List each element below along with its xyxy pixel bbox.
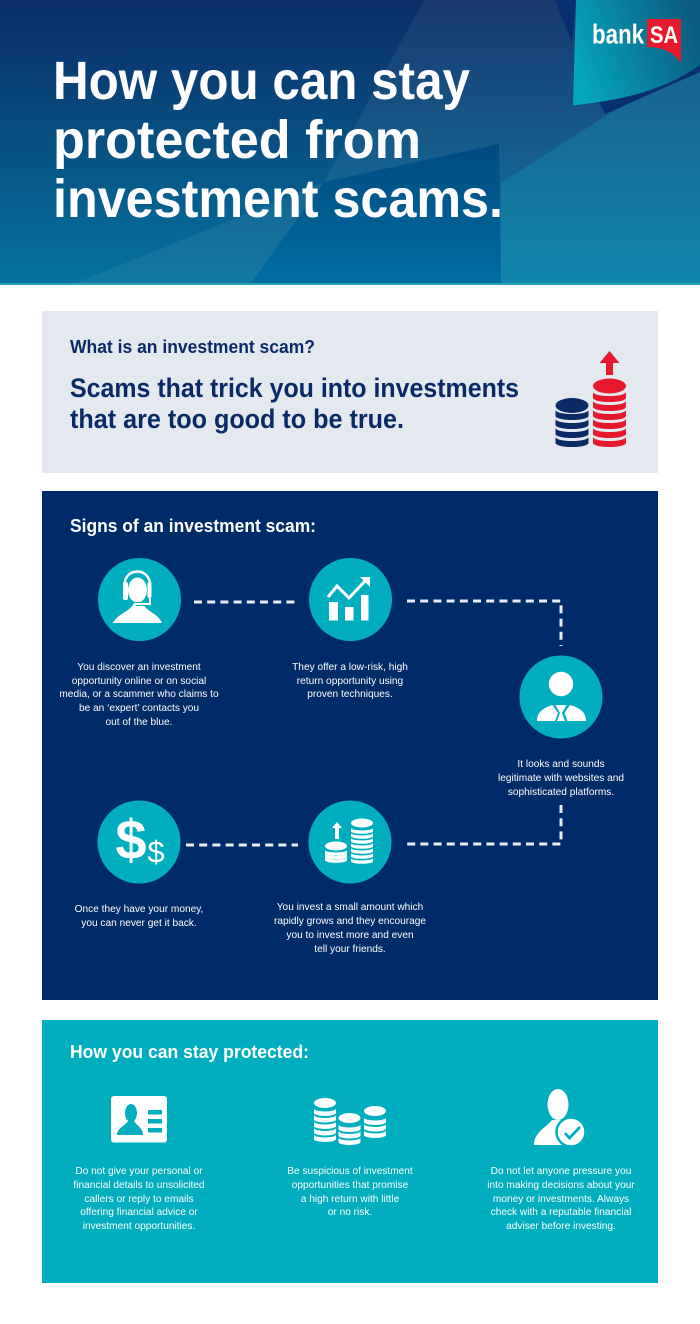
text: proven techniques. [307,689,393,700]
text: be an ‘expert’ contacts you [79,703,199,714]
step 2: low risk high return [292,558,408,700]
tip 3: no pressure [487,1089,635,1232]
tip 1: personal details [73,1096,205,1232]
icon: dollar signs [115,808,165,871]
heading: protected: How you can stay protected: [70,1042,309,1062]
text: callers or reply to emails [84,1194,194,1205]
icon: coins and arrow [325,818,373,864]
text: investment opportunities. [83,1221,195,1232]
dashed connectors [186,601,561,845]
text: you to invest more and even [286,930,414,941]
text: Be suspicious of investment [287,1166,413,1177]
panel: how you can stay protected [42,1020,658,1283]
icon: id card [111,1096,167,1142]
definition text: that are too good to be true. [70,404,404,434]
text [498,759,624,798]
text: opportunity online or on social [72,676,206,687]
icon: coin stacks with arrow [556,351,626,447]
step 3: looks legitimate [498,656,624,798]
icon: headset person [113,572,162,623]
text: out of the blue. [106,717,172,728]
icon: person with check [534,1089,586,1146]
heading: what is an investment scam: What is an investment scam? [70,337,315,357]
text: Do not give your personal or [75,1166,203,1177]
text: Do not let anyone pressure you [491,1166,631,1177]
text: into making decisions about your [487,1180,635,1191]
text [487,1166,635,1232]
title: protected from [53,110,421,170]
panel: what is an investment scam [42,311,658,473]
icon: growth chart [328,577,370,620]
text: or no risk. [328,1207,372,1218]
logo: BankSA: SA [650,22,678,49]
text: sophisticated platforms. [508,787,614,798]
logo: BankSA [555,0,700,114]
text: check with a reputable financial [491,1207,631,1218]
text: offering financial advice or [80,1207,198,1218]
text: They offer a low-risk, high [292,662,408,673]
text [59,662,219,728]
icon: three coin stacks [314,1098,386,1145]
text [287,1166,413,1218]
text: Once they have your money, [75,904,203,915]
step 5: invest small amount [274,800,426,955]
panel: signs of an investment scam [42,491,658,1000]
title: How you can stay [53,51,470,111]
text: financial details to unsolicited [73,1180,205,1191]
text: adviser before investing. [506,1221,616,1232]
text [73,1166,205,1232]
text: you can never get it back. [81,918,197,929]
text: money or investments. Always [493,1194,629,1205]
text: rapidly grows and they encourage [274,916,426,927]
header banner [0,0,700,285]
text: a high return with little [301,1194,400,1205]
text [292,662,408,700]
text: You discover an investment [77,662,201,673]
icon: dollar signs: $ [147,834,165,870]
step 1: expert call [59,558,219,728]
icon: dollar signs: $ [115,808,147,871]
text: It looks and sounds [517,759,605,770]
text: opportunities that promise [292,1180,409,1191]
tip 2: high return little risk [287,1098,413,1218]
title: investment scams. [53,169,503,229]
text [75,904,203,929]
definition text: Scams that trick you into investments [70,373,519,403]
title [53,51,503,229]
text: legitimate with websites and [498,773,624,784]
text: return opportunity using [297,676,403,687]
definition text [70,373,519,434]
heading: signs: Signs of an investment scam: [70,516,316,536]
text: media, or a scammer who claims to [59,689,219,700]
icon: businessman [537,672,586,721]
text: tell your friends. [314,944,386,955]
text [274,902,426,955]
logo: BankSA: bank [592,18,645,50]
step 4: never get it back [75,800,203,929]
text: You invest a small amount which [277,902,423,913]
